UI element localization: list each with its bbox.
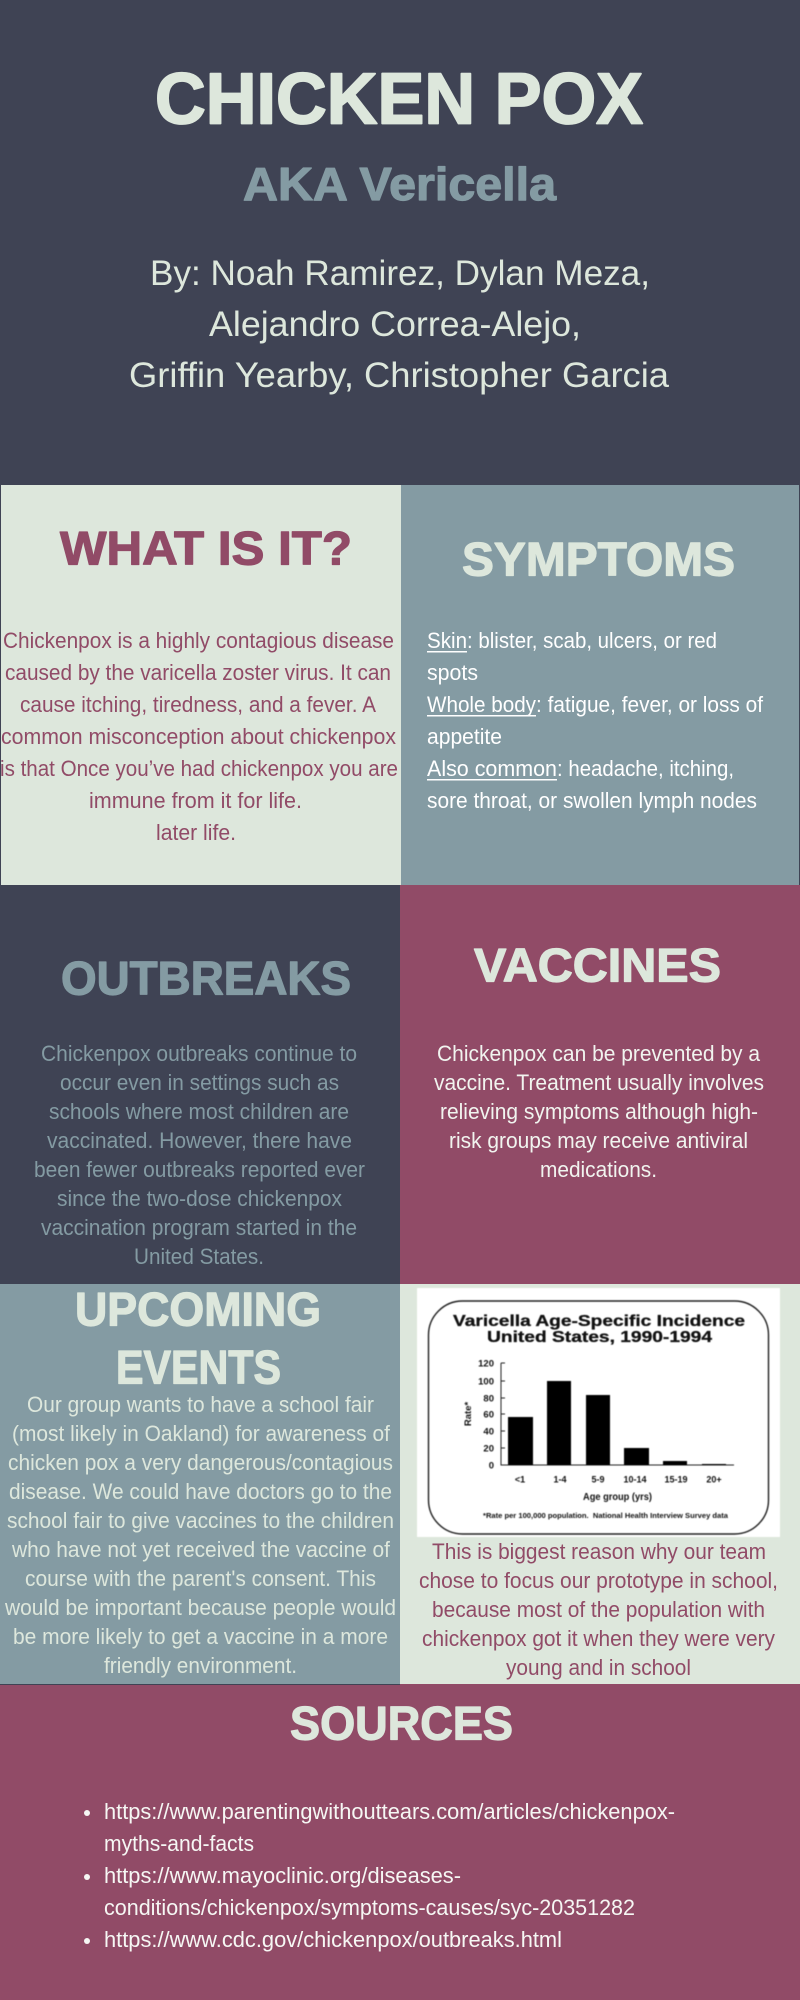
text: vaccines description: risk groups may receive antiviral [449,1128,748,1153]
text: what is it description: caused by the varicella zoster virus. It can [5,660,391,685]
text: outbreaks description: vaccinated. However, there have [47,1128,352,1153]
y axis labels: 120 [478,1358,494,1370]
text: vaccines description: relieving symptoms although high- [440,1099,758,1124]
text: outbreaks description: schools where most children are [49,1099,349,1124]
text: symptoms list: spots [427,660,478,685]
subtitle: AKA Vericella [243,158,556,210]
text: chart explanation: chose to focus our prototype in school, [419,1568,778,1593]
text: what is it description: is that Once you’ve had chickenpox you are [0,756,398,781]
heading: outbreaks: OUTBREAKS [61,952,351,1004]
text: symptoms list: : headache, itching, [557,756,734,781]
text: upcoming events description: be more likely to get a vaccine in a more [13,1624,388,1649]
text: symptoms list: Also common [427,756,557,781]
heading: vaccines: VACCINES [474,938,721,992]
heading: upcoming events: EVENTS [116,1340,281,1394]
text: upcoming events description [4,1392,396,1678]
list: source links: myths-and-facts [104,1831,254,1856]
text: what is it description: common misconception about chickenpox [1,724,396,749]
text: what is it description [0,628,398,845]
text: upcoming events description: chicken pox a very dangerous/contagious [8,1450,393,1475]
heading: sources: SOURCES [290,1696,513,1750]
x axis labels: 10-14 [623,1474,647,1484]
panel: title header [0,0,800,485]
text: symptoms list: : blister, scab, ulcers, or red [467,628,717,653]
list: source links: https://www.cdc.gov/chickenpox/outbreaks.html [104,1927,562,1952]
text: outbreaks description: occur even in settings such as [60,1070,339,1095]
authors: By: Noah Ramirez, Dylan Meza, [150,254,650,293]
list: source links: https://www.parentingwithouttears.com/articles/chickenpox- [104,1799,675,1824]
text: outbreaks description: United States. [134,1244,264,1269]
chart title: Varicella Age-Specific Incidence [453,1313,745,1330]
y axis labels: 20 [483,1444,494,1454]
text: what is it description: immune from it for life. [89,788,302,813]
x axis title: Age group (yrs) [583,1492,652,1503]
panel: what is it [0,485,401,885]
panel: upcoming events [0,1282,400,1684]
text: vaccines description: medications. [540,1157,657,1182]
text: symptoms list: Whole body [427,692,536,717]
text: what is it description: Chickenpox is a highly contagious disease [3,628,394,653]
panel: sources [0,1684,800,2000]
heading: upcoming events: UPCOMING [75,1282,321,1336]
list: source links: https://www.mayoclinic.org/diseases- [104,1863,461,1888]
chart title: United States, 1990-1994 [487,1329,712,1346]
y axis labels [478,1358,494,1472]
panel: symptoms [401,485,800,885]
text: vaccines description: Chickenpox can be prevented by a [437,1041,761,1066]
text: symptoms list: sore throat, or swollen lymph nodes [427,788,757,813]
authors: Alejandro Correa-Alejo, [209,305,581,344]
text: upcoming events description: (most likely in Oakland) for awareness of [12,1421,391,1446]
bars [508,1381,726,1465]
x axis labels: 1-4 [553,1474,567,1484]
text: upcoming events description: school fair to give vaccines to the children [7,1508,394,1533]
x axis labels: 5-9 [591,1474,605,1484]
text: outbreaks description: Chickenpox outbreaks continue to [41,1041,357,1066]
panel: incidence chart and explanation [400,1284,800,1684]
y axis labels: 100 [478,1376,494,1388]
x axis labels: <1 [515,1474,525,1484]
text: vaccines description: vaccine. Treatment usually involves [434,1070,764,1095]
text: symptoms list: appetite [427,724,502,749]
text: upcoming events description: friendly environment. [104,1653,297,1678]
chart axes [501,1363,734,1465]
text: chart explanation: This is biggest reason why our team [432,1539,766,1564]
y axis labels: 0 [489,1460,494,1472]
x axis labels [515,1474,722,1484]
chart title [453,1313,745,1346]
y axis labels: 60 [483,1410,494,1420]
panel: outbreaks [0,885,400,1284]
text: what is it description: later life. [156,820,236,845]
text: chart explanation: young and in school [506,1655,691,1680]
y axis labels: 80 [483,1394,494,1404]
text: chart explanation: because most of the population with [432,1597,765,1622]
text: upcoming events description: Our group wants to have a school fair [27,1392,374,1417]
y axis title: Rate* [463,1402,474,1426]
text: upcoming events description: would be important because people would [4,1595,396,1620]
x axis labels: 15-19 [664,1474,688,1484]
heading: symptoms: SYMPTOMS [462,532,735,586]
text: chart explanation: chickenpox got it when they were very [422,1626,775,1651]
authors [129,254,670,395]
heading: what is it: WHAT IS IT? [60,522,352,574]
text: outbreaks description: vaccination program started in the [41,1215,357,1240]
text: symptoms list: : fatigue, fever, or loss of [536,692,764,717]
text: upcoming events description: disease. We could have doctors go to the [9,1479,392,1504]
text: vaccines description [434,1041,764,1182]
heading: upcoming events [75,1282,321,1394]
authors: Griffin Yearby, Christopher Garcia [129,356,670,395]
panel: vaccines [400,885,800,1284]
chart footnote: *Rate per 100,000 population. National Health Interview Survey data [483,1511,729,1520]
text: outbreaks description [34,1041,365,1269]
text: outbreaks description: been fewer outbreaks reported ever [34,1157,365,1182]
title: CHICKEN POX [155,60,643,140]
text: symptoms list [427,628,764,813]
bar chart: varicella age-specific incidence [417,1288,780,1537]
text: chart explanation [419,1539,778,1680]
list: source links [84,1799,675,1952]
x axis labels: 20+ [706,1474,722,1484]
text: upcoming events description: course with the parent's consent. This [25,1566,376,1591]
text: outbreaks description: since the two-dose chickenpox [57,1186,342,1211]
list: source links: conditions/chickenpox/symptoms-causes/syc-20351282 [104,1895,635,1920]
y axis labels: 40 [483,1426,494,1438]
text: upcoming events description: who have not yet received the vaccine of [11,1537,391,1562]
text: what is it description: cause itching, tiredness, and a fever. A [20,692,376,717]
text: symptoms list: Skin [427,628,467,653]
